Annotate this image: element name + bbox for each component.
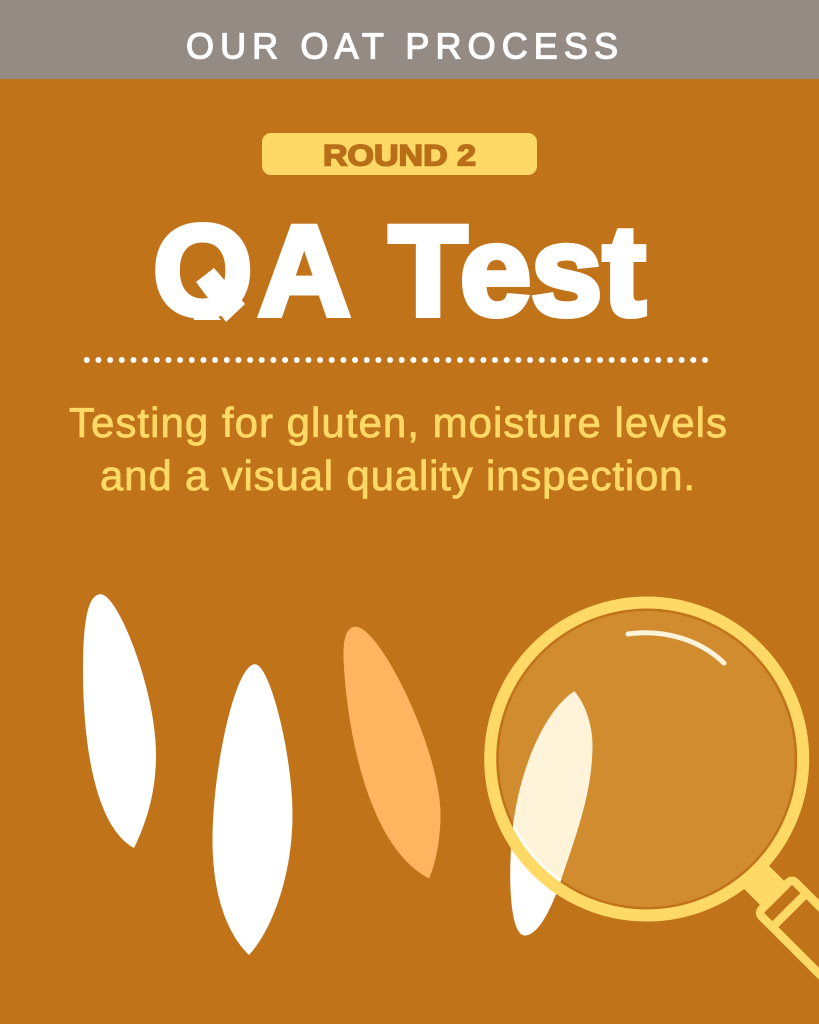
magnifying glass [490,602,819,1024]
subtitle: Testing for gluten, moisture levels [69,399,727,446]
subtitle: and a visual quality inspection. [100,452,695,499]
lens highlight [628,633,724,663]
dotted divider [87,357,705,363]
round badge [262,133,537,175]
oat grain 1 [83,594,156,848]
handle [734,854,819,1024]
subtitle [69,399,727,499]
round badge: ROUND 2 [323,140,476,172]
oat grain 2 [212,664,292,955]
lens rim [490,602,803,916]
title: QA Test [153,200,646,343]
header band: OUR OAT PROCESS [186,26,618,66]
oat grain 4 (under lens) [510,691,592,936]
header band [0,0,819,79]
lens [499,611,795,907]
oat grain 3 (discoloured) [343,627,440,878]
